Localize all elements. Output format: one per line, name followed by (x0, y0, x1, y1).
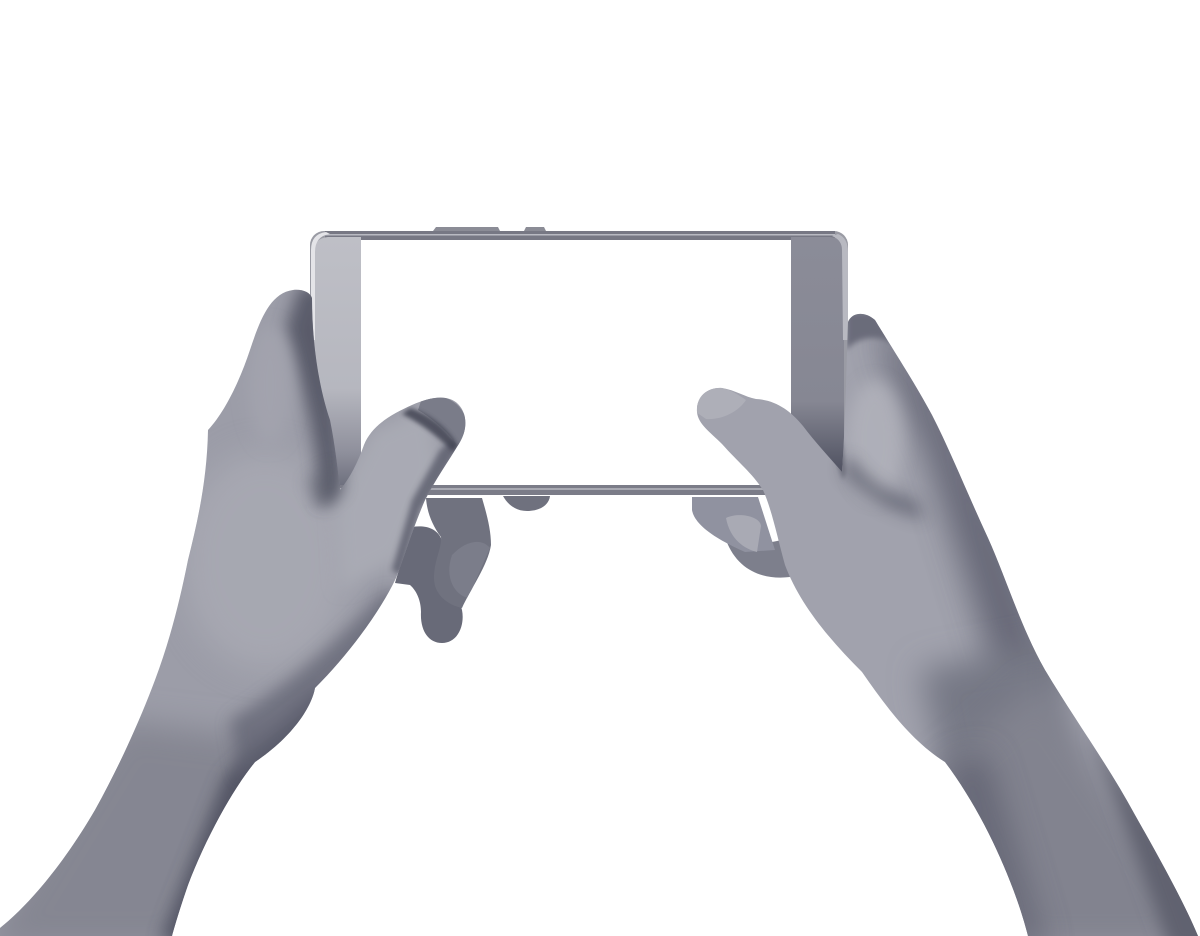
right palm highlight (847, 380, 903, 500)
left finger shading (285, 285, 345, 505)
phone top edge (325, 231, 835, 240)
left hand base (0, 280, 480, 936)
right fingernail (726, 515, 761, 552)
left upper finger (426, 498, 491, 608)
left thumb body (332, 419, 435, 576)
left small fingertip (503, 496, 550, 511)
right upper finger (692, 497, 775, 552)
right thumb crease line (836, 440, 846, 480)
phone body frame (310, 231, 848, 495)
left cuticle shadow (402, 408, 458, 452)
left forearm (0, 720, 280, 936)
left thumb crease (304, 472, 346, 508)
left thumbnail (418, 396, 468, 446)
right hand base (690, 300, 1200, 936)
right thumbnail (696, 388, 746, 419)
left palm light (192, 464, 334, 656)
left finger highlight (250, 330, 298, 382)
icon: right hand (690, 300, 1200, 936)
left upper finger nail (449, 542, 490, 598)
left lower finger (395, 526, 463, 643)
icon: left hand back fingers (395, 496, 550, 643)
right wrist dark (920, 640, 1060, 780)
phone left bezel (314, 237, 361, 490)
left thumb underside shadow (392, 425, 470, 575)
right forearm (944, 702, 1198, 936)
phone screen (361, 240, 791, 485)
phone right bezel (791, 237, 844, 490)
right palm crease (842, 455, 925, 520)
phone top buttons (433, 227, 546, 231)
phone (310, 227, 848, 495)
right outer edge shadow (880, 310, 1060, 690)
right lower finger (726, 540, 790, 578)
left forearm dark side (155, 691, 314, 936)
illustration: two hands holding a phone (0, 227, 1198, 936)
right finger top (847, 314, 890, 350)
icon: left hand (0, 280, 480, 936)
phone bottom edge (340, 485, 765, 495)
icon: right hand back fingers (692, 497, 790, 578)
left hand under edge shadow (225, 586, 392, 769)
